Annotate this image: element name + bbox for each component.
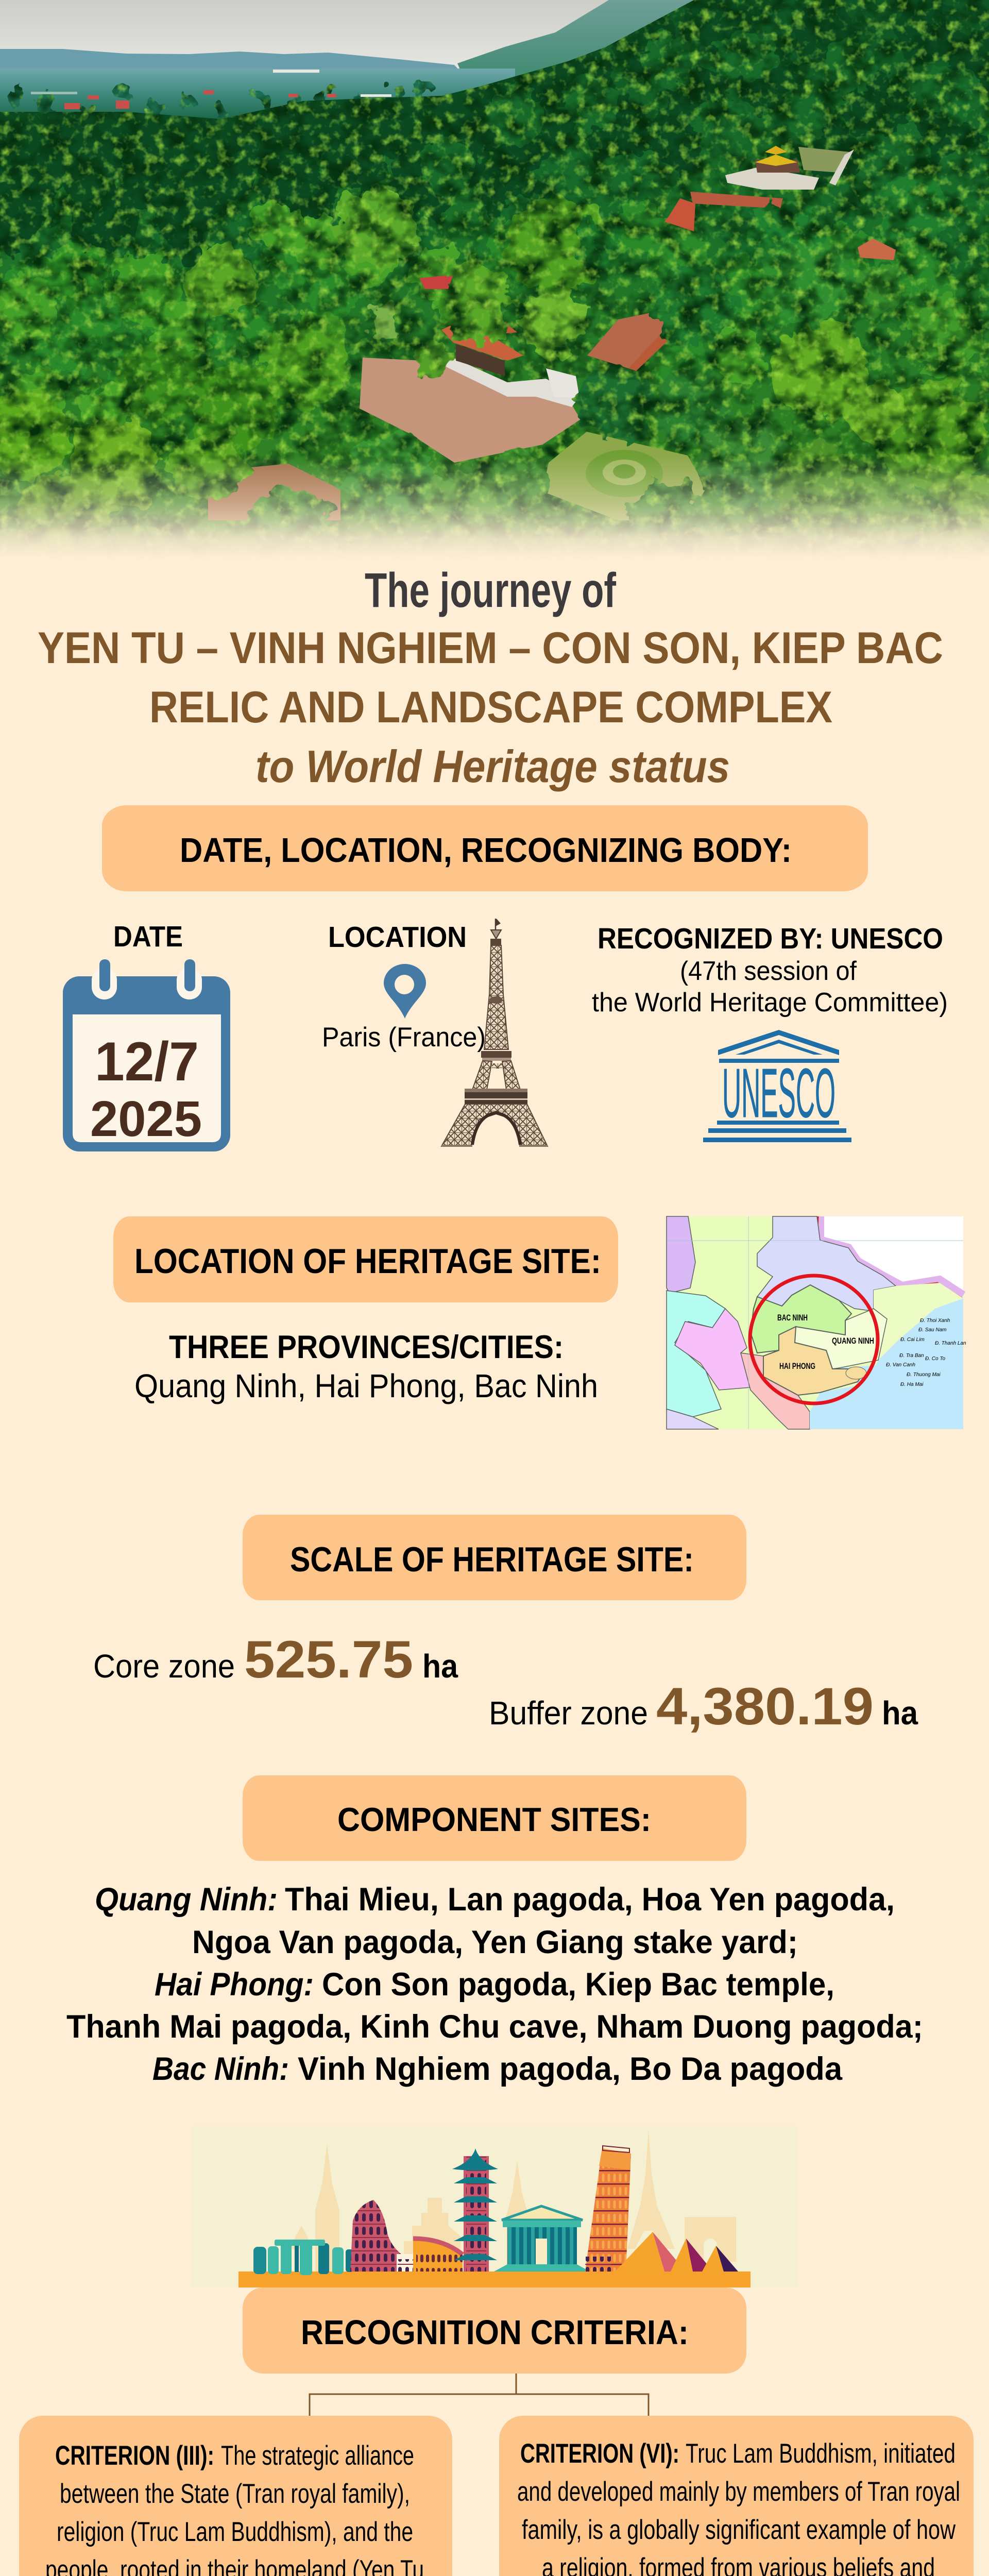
component sites list: Thai Mieu, Lan pagoda, Hoa Yen pagoda, bbox=[285, 1882, 895, 1918]
title: to World Heritage status bbox=[255, 741, 730, 792]
heading pill: date, location, recognizing body bbox=[102, 805, 868, 891]
recognized by text: (47th session of bbox=[680, 956, 857, 986]
three provinces text bbox=[134, 1329, 598, 1404]
heading pill: scale of heritage site: SCALE OF HERITAGE SITE: bbox=[290, 1540, 694, 1579]
panel: scale of heritage site bbox=[93, 1515, 918, 1736]
title: RELIC AND LANDSCAPE COMPLEX bbox=[149, 683, 832, 732]
icon: Eiffel tower bbox=[441, 919, 548, 1147]
card: criterion III bbox=[19, 2416, 452, 2576]
component sites list bbox=[66, 1882, 923, 2087]
card: criterion III: religion (Truc Lam Buddhism), and the bbox=[57, 2517, 413, 2547]
recognized by text: the World Heritage Committee) bbox=[592, 988, 948, 1018]
component sites list: Quang Ninh: bbox=[95, 1882, 278, 1918]
core zone stat: ha bbox=[422, 1648, 458, 1685]
panel: date, location, recognizing body bbox=[63, 805, 948, 1151]
map of provinces: Đ. Co To bbox=[925, 1356, 946, 1362]
icon: calendar with date: 2025 bbox=[90, 1091, 202, 1147]
component sites list: Thanh Mai pagoda, Kinh Chu cave, Nham Duong pagoda; bbox=[66, 2009, 923, 2045]
icon: UNESCO logo bbox=[703, 1030, 851, 1142]
icon: calendar with date bbox=[63, 959, 230, 1151]
map of provinces: Đ. Ha Mai bbox=[900, 1382, 924, 1387]
card: criterion III: CRITERION (III): bbox=[55, 2441, 214, 2471]
map of provinces: Đ. Thuong Mai bbox=[907, 1372, 941, 1378]
core zone stat bbox=[93, 1630, 458, 1689]
map of provinces: Đ. Van Canh bbox=[886, 1362, 915, 1368]
buffer zone stat bbox=[489, 1677, 918, 1736]
connector: heading to criteria cards bbox=[310, 2374, 649, 2417]
map of provinces: Đ. Thanh Lan bbox=[935, 1341, 966, 1346]
component sites list: Hai Phong: bbox=[155, 1967, 314, 2003]
component sites list: Ngoa Van pagoda, Yen Giang stake yard; bbox=[192, 1924, 798, 1960]
hero photo: forest and temple aerial view bbox=[0, 0, 989, 587]
buffer zone stat: Buffer zone bbox=[489, 1694, 648, 1732]
location label: LOCATION bbox=[328, 921, 467, 954]
heading pill: component sites bbox=[243, 1775, 746, 1861]
heading pill: scale of heritage site bbox=[243, 1515, 746, 1600]
location text: Paris (France) bbox=[322, 1022, 486, 1053]
panel: recognition criteria bbox=[19, 2287, 974, 2576]
card: criterion VI: CRITERION (VI): bbox=[520, 2438, 679, 2469]
buffer zone stat: 4,380.19 bbox=[656, 1677, 874, 1736]
recognized by text: RECOGNIZED BY: UNESCO bbox=[598, 922, 943, 955]
panel: location of heritage site bbox=[113, 1216, 966, 1429]
map of provinces: Đ. Thoi Xanh bbox=[920, 1318, 950, 1324]
icon: map pin bbox=[384, 964, 426, 1019]
heading pill: recognition criteria: RECOGNITION CRITERIA: bbox=[301, 2313, 689, 2352]
recognized by text bbox=[592, 922, 948, 1018]
core zone stat: Core zone bbox=[93, 1648, 235, 1685]
illustration: world landmarks skyline bbox=[192, 2126, 798, 2287]
three provinces text: THREE PROVINCES/CITIES: bbox=[169, 1329, 564, 1365]
heading pill: location of heritage site: LOCATION OF HERITAGE SITE: bbox=[134, 1242, 601, 1281]
map of provinces: QUANG NINH bbox=[832, 1336, 874, 1346]
card: criterion III: The strategic alliance bbox=[221, 2441, 414, 2471]
core zone stat: 525.75 bbox=[244, 1630, 413, 1689]
heading pill: location of heritage site bbox=[113, 1216, 618, 1302]
title bbox=[38, 563, 943, 792]
map of provinces: BAC NINH bbox=[777, 1313, 808, 1323]
map of provinces: HAI PHONG bbox=[779, 1361, 815, 1371]
date label: DATE bbox=[113, 920, 183, 953]
three provinces text: Quang Ninh, Hai Phong, Bac Ninh bbox=[134, 1367, 598, 1404]
map of provinces: Đ. Tra Ban bbox=[899, 1353, 924, 1359]
component sites list: Vinh Nghiem pagoda, Bo Da pagoda bbox=[298, 2051, 843, 2087]
buffer zone stat: ha bbox=[882, 1694, 918, 1732]
map of provinces bbox=[667, 1216, 966, 1429]
heading pill: recognition criteria bbox=[243, 2287, 746, 2374]
heading pill: date, location, recognizing body: DATE, LOCATION, RECOGNIZING BODY: bbox=[180, 831, 792, 870]
component sites list: Bac Ninh: bbox=[152, 2051, 289, 2087]
title: The journey of bbox=[365, 563, 616, 618]
panel: component sites bbox=[66, 1775, 923, 2087]
map of provinces: Đ. Sau Nam bbox=[918, 1327, 946, 1333]
component sites list: Con Son pagoda, Kiep Bac temple, bbox=[322, 1967, 834, 2003]
card: criterion III: between the State (Tran royal family), bbox=[60, 2479, 410, 2509]
map of provinces: Đ. Cai Lim bbox=[900, 1337, 925, 1343]
card: criterion VI bbox=[499, 2416, 974, 2576]
heading pill: component sites: COMPONENT SITES: bbox=[337, 1801, 651, 1838]
icon: calendar with date: 12/7 bbox=[95, 1030, 199, 1092]
